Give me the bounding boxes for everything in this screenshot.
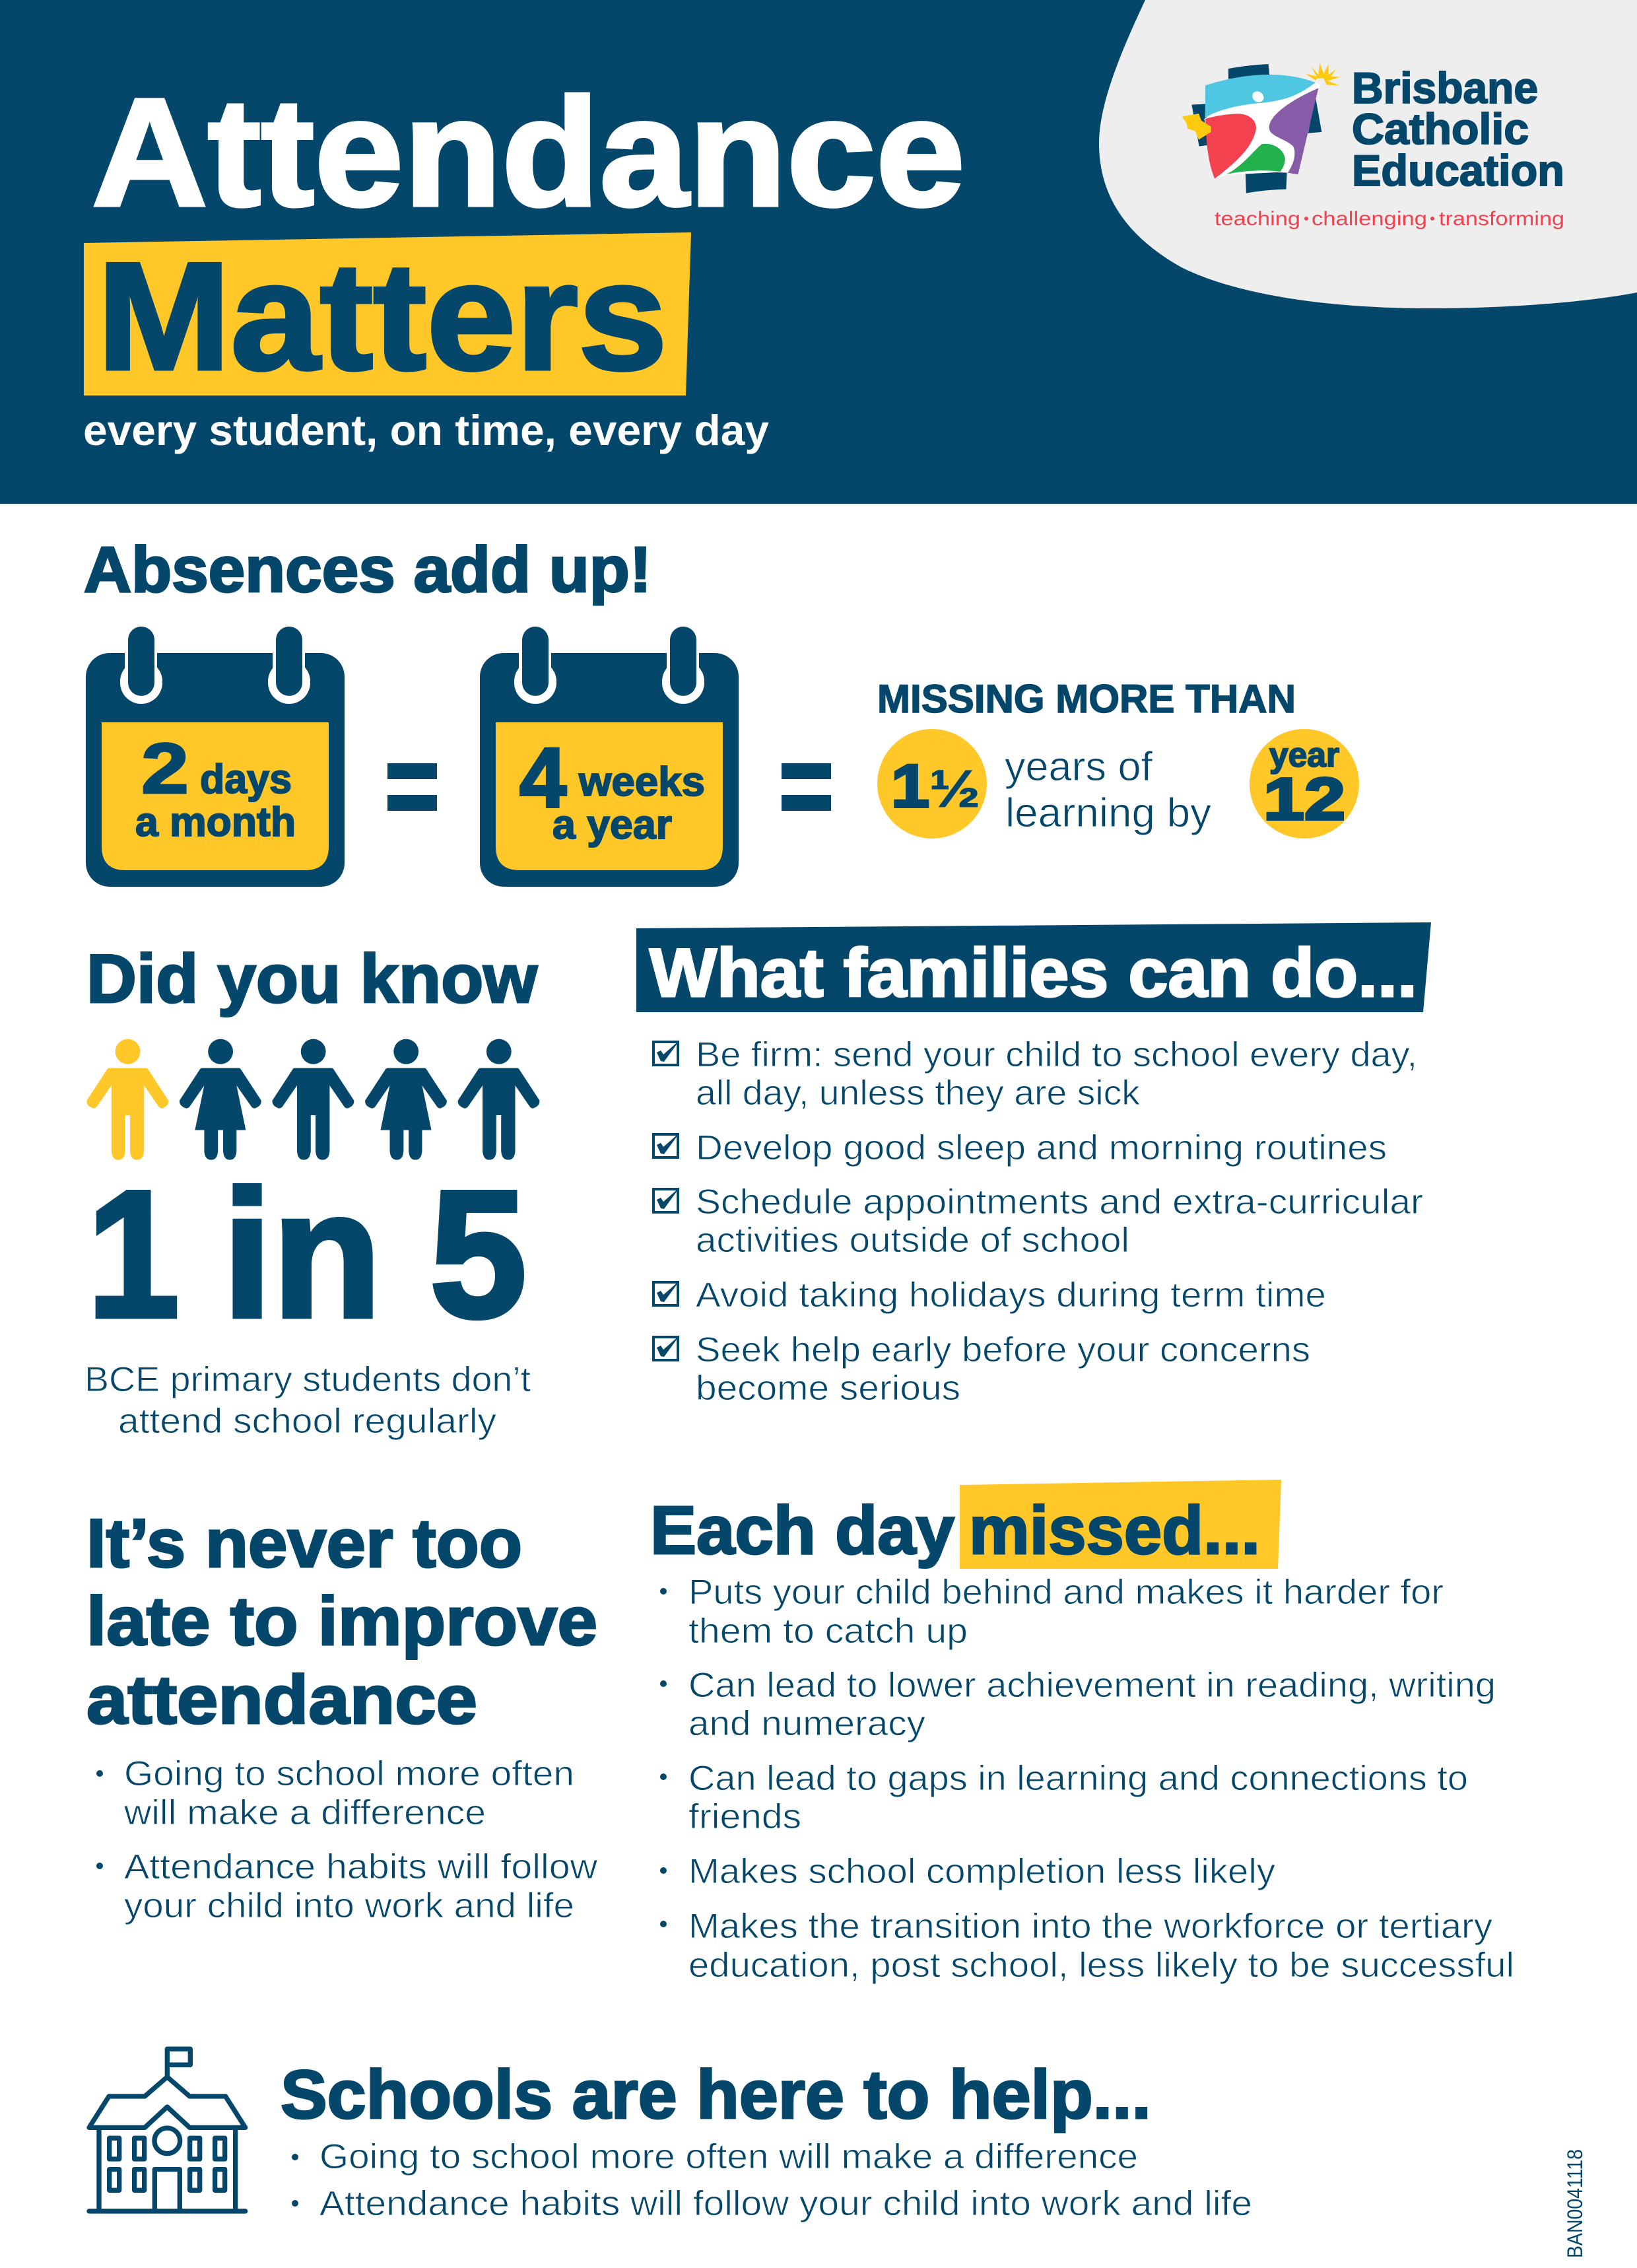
heading: Each day missed: missed... [969,1492,1260,1568]
big statistic: 1 in 5 [87,1153,527,1356]
checklist item 3: Schedule appointments and extra-curricular [696,1183,1423,1221]
heading: It's never too late to improve attendance [86,1505,597,1738]
heading: Schools are here to help: Schools are here to help... [281,2057,1151,2133]
text: years of learning by: years of [1005,744,1153,790]
logo wordmark [1352,63,1564,195]
section: absences add up [84,533,1359,887]
heading: It's never too late to improve attendance: late to improve [86,1583,597,1660]
text: years of learning by: learning by [1005,790,1211,836]
checklist item 2: Develop good sleep and morning routines [696,1128,1387,1167]
checklist item 1 [653,1035,1417,1113]
section: did you know [84,941,539,1441]
header banner [0,0,1637,504]
bullet list: education, post school, less likely to be successful [688,1946,1514,1985]
caption: BCE primary students [84,1360,531,1441]
bullet list: Attendance habits will follow [124,1847,598,1886]
bullet list: Going to school more often [124,1754,574,1793]
calendar: 4 weeks a year: weeks [578,759,705,805]
equals sign [387,763,437,811]
bullet list: Puts your child behind and makes it harder for [688,1573,1444,1612]
heading: Each day missed: Each day [650,1492,954,1568]
checklist item 3 [653,1183,1423,1260]
callout: missing more than: MISSING MORE THAN [877,677,1296,721]
bullet list: Attendance habits will follow your child into work and life [319,2184,1252,2223]
logo wordmark: Education [1352,146,1564,195]
bullet list: Makes the transition into the workforce or tertiary [688,1907,1493,1946]
bullet list: Going to school more often will make a difference [319,2137,1138,2176]
badge: one and a half: ½ [929,759,980,818]
heading: It's never too late to improve attendance: It’s never too [86,1505,522,1582]
bullet list: will make a difference [123,1793,486,1832]
caption: BCE primary students: attend school regularly [118,1402,497,1441]
bullet list [292,2137,1252,2223]
callout: missing more than [877,677,1359,839]
heading: It's never too late to improve attendance: attendance [86,1662,477,1738]
checklist item 5: become serious [696,1369,960,1408]
icon: school building [89,2049,246,2211]
bullet list: Makes school completion less likely [688,1852,1276,1891]
badge: one and a half [877,729,987,839]
heading: Did you know: Did you know [86,941,538,1017]
text: years of learning by [1005,744,1211,836]
badge: one and a half: 1 [891,753,929,820]
calendar: 2 days a month: a month [135,800,296,845]
logo wordmark: Catholic [1352,104,1529,153]
bullet list: and numeracy [688,1704,926,1743]
icon row: five people, one highlighted [86,1039,539,1160]
logo tagline [1215,208,1564,230]
checklist item 3: activities outside of school [696,1221,1129,1260]
logo wordmark: Brisbane [1352,63,1538,112]
calendar: 2 days a month: days [200,757,292,802]
checklist item 4: Avoid taking holidays during term time [696,1276,1326,1315]
calendar: 2 days a month: 2 [141,728,189,808]
logo panel [1099,0,1637,308]
bullet list: Can lead to lower achievement in reading, writing [688,1666,1496,1705]
logo tagline: challenging [1312,208,1427,230]
heading: Each day missed [650,1480,1281,1569]
badge: year 12: 12 [1263,767,1345,833]
panel: what families can do [636,922,1431,1408]
calendar: 4 weeks a year: a year [552,802,672,848]
panel: each day missed [650,1480,1514,1985]
calendar: 2 days a month [86,627,345,887]
caption: BCE primary students: BCE primary students don’t [84,1360,531,1399]
heading: Absences add up: Absences add up! [84,533,651,605]
bullet list: Can lead to gaps in learning and connections to [688,1759,1468,1798]
calendar: 4 weeks a year [480,627,739,887]
panel: never too late [86,1505,598,1925]
big statistic: 1 in 5: in [222,1153,382,1356]
document code: BAN0041118 [1563,2149,1587,2258]
bullet list: friends [688,1797,801,1836]
big statistic: 1 in 5: 1 [87,1153,180,1356]
equals sign [782,763,831,811]
big statistic: 1 in 5: 5 [430,1153,527,1356]
badge: year 12: year [1269,736,1339,774]
title highlight: Matters: Matters [97,231,667,402]
icon: Brisbane Catholic Education emblem [1182,63,1340,193]
logo tagline: transforming [1439,208,1564,230]
bullet list [96,1754,598,1925]
bullet list: them to catch up [688,1612,968,1651]
bullet list: your child into work and life [124,1886,574,1925]
checklist item 1: all day, unless they are sick [696,1074,1141,1113]
panel: schools are here to help [89,2049,1252,2223]
checklist item 5: Seek help early before your concerns [696,1330,1310,1369]
badge: year 12 [1250,729,1359,839]
title: Attendance: Attendance [92,67,965,238]
subtitle: every student, on time, every day [83,406,769,454]
heading banner: What families can do... [650,935,1417,1012]
checklist item 1: Be firm: send your child to school every day, [696,1035,1417,1074]
bullet list [660,1573,1514,1985]
checklist item 5 [653,1330,1310,1408]
logo tagline: teaching [1215,208,1300,230]
calendar: 4 weeks a year: 4 [519,731,566,825]
